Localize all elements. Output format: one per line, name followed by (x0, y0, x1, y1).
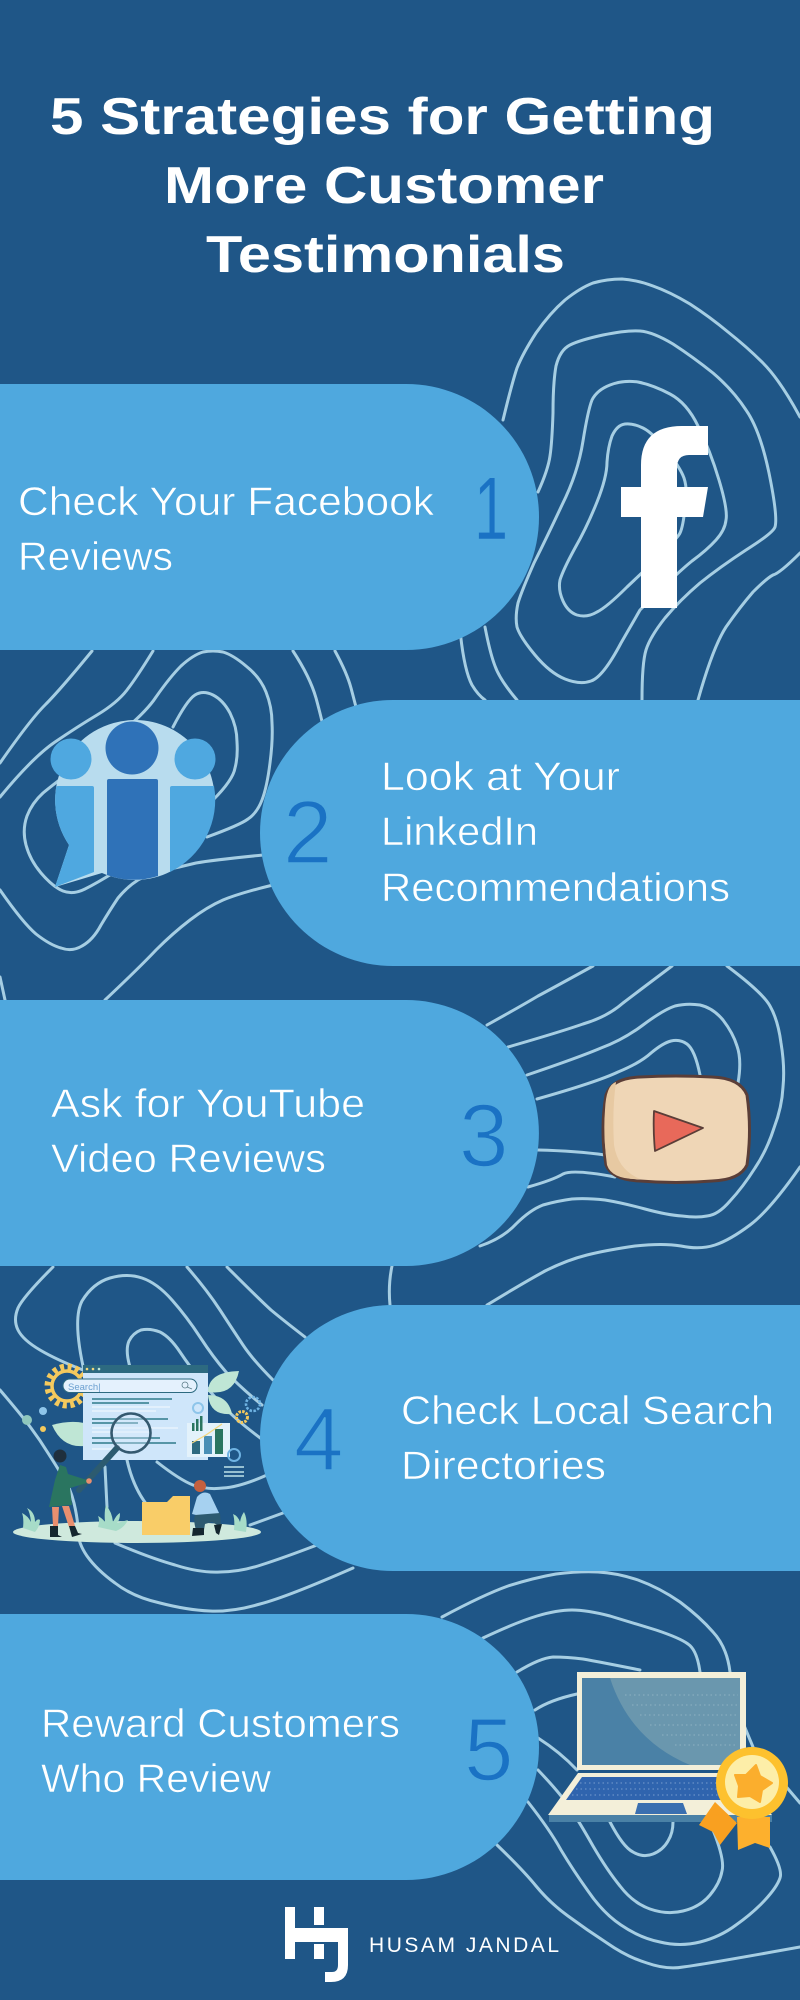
text: strategy 3: Video Reviews (51, 1137, 326, 1181)
plants (22, 1505, 247, 1532)
charts (187, 1423, 230, 1457)
logo: husam jandal (285, 1907, 559, 1982)
icon: search illustration: Search| (68, 1382, 101, 1393)
text: strategy 2: Look at Your (381, 755, 620, 799)
text: strategy 2 (381, 755, 730, 910)
number 4: 4 (294, 1389, 344, 1489)
magnifier (79, 1448, 117, 1490)
ground (13, 1521, 261, 1543)
panel: strategy 2 (260, 700, 800, 966)
panel: strategy 1 (0, 384, 539, 650)
text: strategy 1: Reviews (18, 535, 173, 579)
number 3: 3 (459, 1085, 508, 1185)
search bar (63, 1379, 197, 1392)
text: strategy 4 (401, 1389, 774, 1488)
text: strategy 1 (18, 480, 434, 579)
panel: strategy 4 (260, 1305, 800, 1571)
title: More Customer (164, 157, 604, 215)
dots (39, 1407, 47, 1415)
woman (49, 1465, 87, 1507)
leaves (52, 1371, 239, 1446)
text: strategy 5 (41, 1702, 400, 1801)
text: strategy 5: Who Review (41, 1757, 271, 1801)
result lines (92, 1399, 176, 1443)
laptop (577, 1672, 746, 1770)
text: strategy 5: Reward Customers (41, 1702, 400, 1746)
icon: search illustration (13, 1365, 261, 1543)
number 2: 2 (283, 782, 332, 882)
title (50, 88, 715, 284)
icon: youtube play button (603, 1076, 750, 1182)
text: strategy 2: Recommendations (381, 866, 730, 910)
man (194, 1480, 206, 1492)
logo mark (285, 1907, 348, 1982)
icon: laptop with award (548, 1672, 788, 1850)
text: strategy 3: Ask for YouTube (51, 1082, 365, 1126)
gear (48, 1367, 86, 1405)
text: strategy 4: Check Local Search (401, 1389, 774, 1433)
text: strategy 4: Directories (401, 1444, 606, 1488)
icon: facebook f (621, 426, 708, 608)
number 1: 1 (474, 458, 508, 558)
award medal (716, 1747, 788, 1819)
browser window (83, 1365, 208, 1460)
title: Testimonials (206, 226, 565, 284)
text: strategy 3 (51, 1082, 365, 1181)
number 5: 5 (464, 1699, 514, 1799)
panel: strategy 5 (0, 1614, 539, 1880)
folder (142, 1496, 190, 1535)
text: strategy 1: Check Your Facebook (18, 480, 434, 524)
award ribbons (699, 1802, 737, 1845)
panel: strategy 3 (0, 1000, 539, 1266)
title: 5 Strategies for Getting (50, 88, 715, 146)
icon: linkedin recommendations bubble (50, 720, 216, 887)
logo wordmark: HUSAM JANDAL (369, 1934, 559, 1957)
text: strategy 2: LinkedIn (381, 810, 538, 854)
